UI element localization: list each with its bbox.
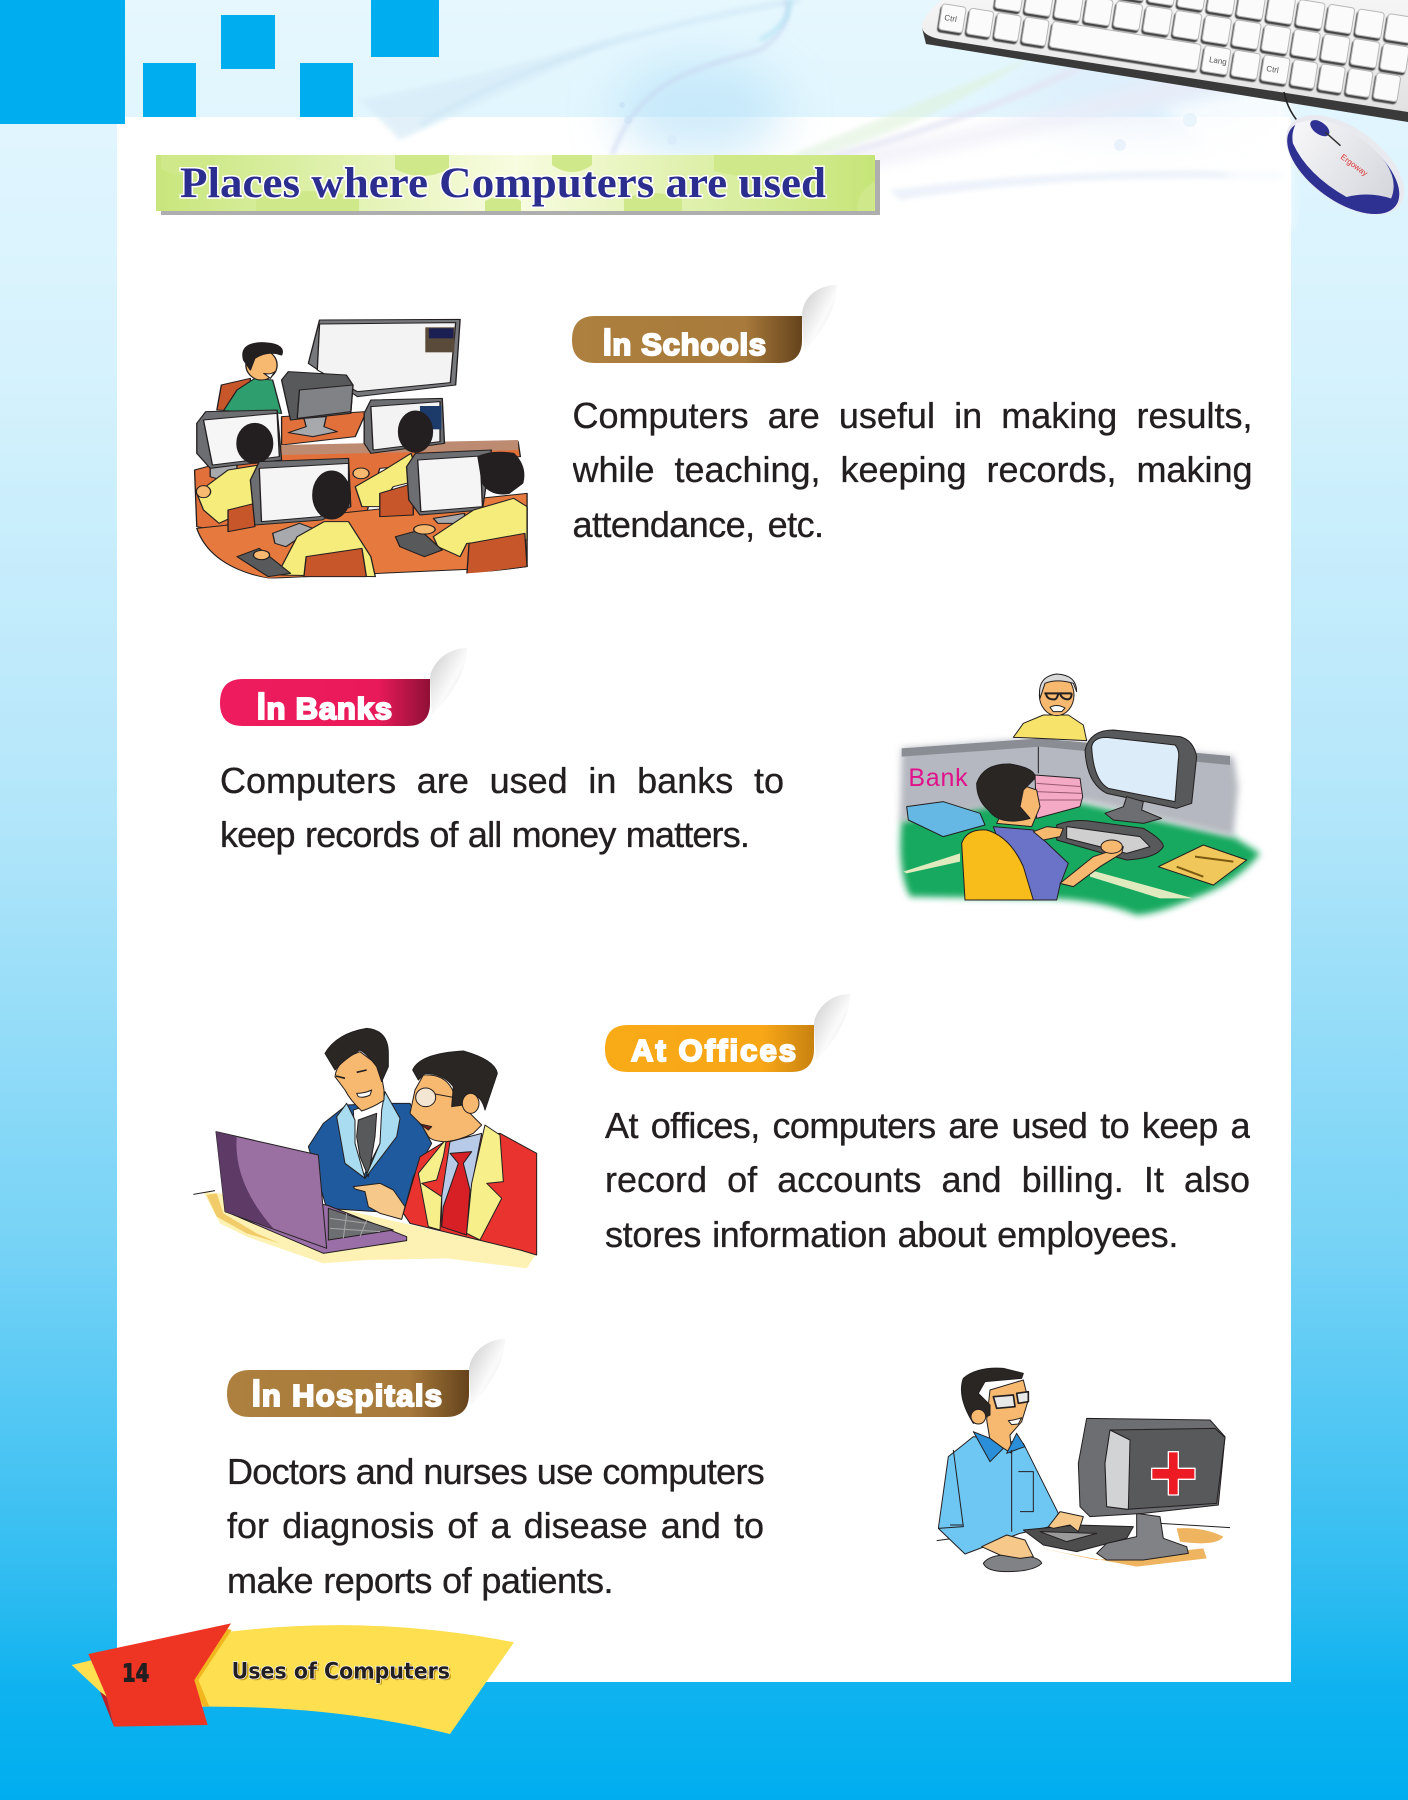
text: at offices: At offices, computers are used to keep a [605, 1104, 1250, 1146]
text: in hospitals: make reports of patients. [227, 1560, 613, 1600]
running title: Uses of Computers [232, 1659, 450, 1684]
illustration: bank clerk at computer [894, 674, 1264, 920]
keyboard [922, 0, 1408, 122]
badge: in hospitals: İn Hospitals [252, 1378, 442, 1413]
section: in banks [220, 648, 1264, 920]
illustration: computer classroom [194, 318, 528, 578]
title banner [156, 155, 880, 215]
page number tab: 14 [122, 1658, 149, 1687]
swoosh background [360, 0, 1291, 230]
text: in schools: while teaching, keeping records, making [572, 449, 1252, 490]
text: in banks [220, 760, 784, 855]
text: in banks: keep records of all money matters. [220, 814, 749, 855]
text: in schools: Computers are useful in making results, [572, 394, 1252, 436]
illustration: bank clerk at computer: Bank [908, 764, 968, 792]
header artwork with swooshes, squares, keyboard and mouse [0, 0, 1408, 226]
text: in hospitals: for diagnosis of a disease and to [227, 1505, 764, 1546]
badge: at offices [605, 994, 850, 1072]
running title: Uses of Computers [234, 1661, 452, 1686]
badge: in banks [220, 648, 466, 726]
white page panel [117, 117, 1291, 1682]
text: at offices: record of accounts and billing. It also [605, 1159, 1250, 1200]
text: in hospitals [227, 1450, 764, 1601]
text: in schools [572, 394, 1252, 544]
keyboard: Ctrl [944, 13, 958, 24]
text: at offices: stores information about employees. [605, 1214, 1178, 1254]
text: at offices [605, 1104, 1250, 1255]
badge: in banks: İn Banks [257, 691, 392, 726]
mouse [1268, 92, 1408, 235]
section: in hospitals [227, 1339, 1230, 1601]
illustration: doctor at computer [936, 1368, 1230, 1572]
badge: in schools [572, 285, 836, 363]
text: in banks: Computers are used in banks to [220, 760, 784, 800]
section: at offices [193, 994, 1250, 1268]
illustration: office workers at laptop [193, 1028, 538, 1268]
footer ribbon with page number [72, 1623, 514, 1734]
title banner: Places where Computers are used [180, 160, 826, 207]
section: in schools [194, 285, 1252, 578]
ribbon body [183, 1625, 514, 1734]
page number tab [88, 1623, 231, 1727]
text: in hospitals: Doctors and nurses use computers [227, 1450, 764, 1492]
keyboard: Ctrl [1266, 64, 1280, 75]
badge: at offices: At Offices [631, 1033, 796, 1068]
keyboard: Lang [1208, 55, 1227, 67]
mouse: Ergoway [1339, 152, 1369, 178]
badge: in hospitals [227, 1339, 504, 1417]
blue corner block and squares [0, 0, 439, 124]
badge: in schools: İn Schools [603, 327, 766, 362]
text: in schools: attendance, etc. [572, 504, 824, 544]
